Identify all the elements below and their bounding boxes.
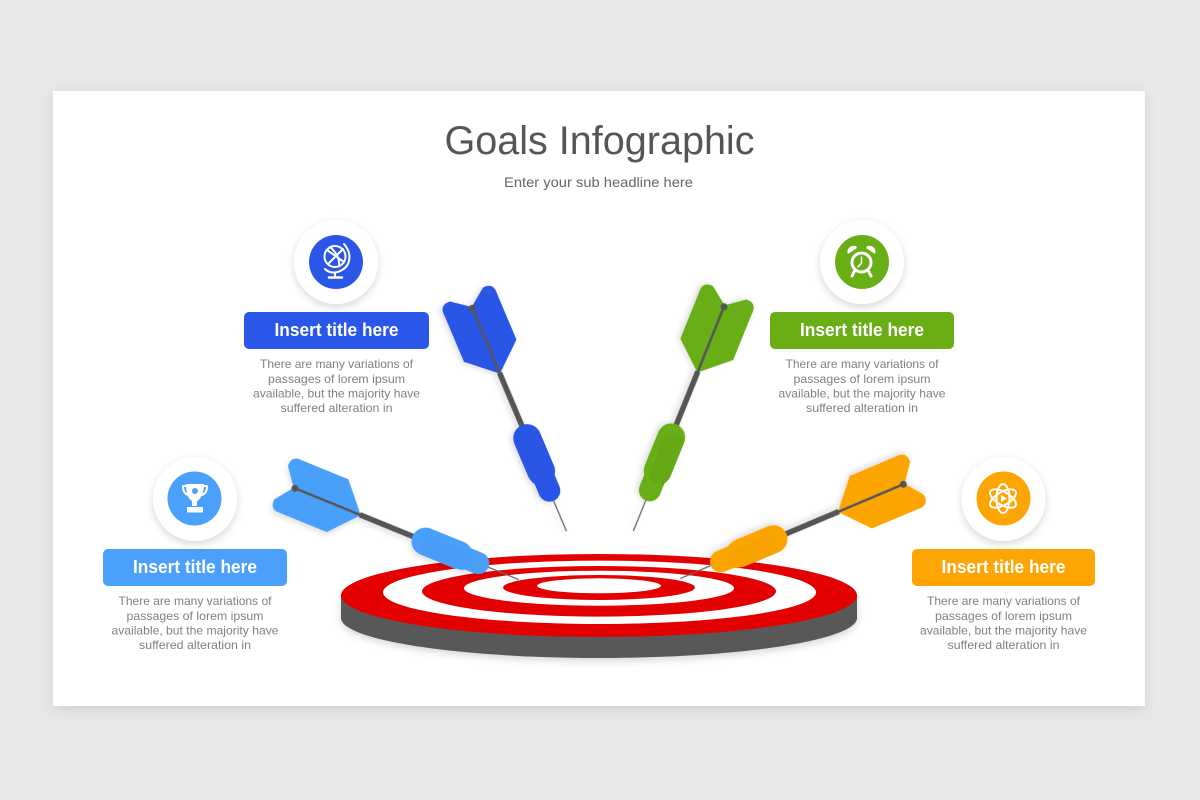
- description: available, but the majority have: [920, 624, 1087, 638]
- dart: green: [607, 282, 756, 542]
- shaft: [838, 484, 903, 512]
- red ring 2: [422, 566, 776, 617]
- description: suffered alteration in: [280, 401, 392, 415]
- needle: [552, 497, 566, 531]
- white ring 2: [464, 571, 734, 606]
- shaft thick: [500, 373, 525, 433]
- dart: dark blue: [440, 283, 593, 542]
- dart: light blue: [270, 456, 530, 606]
- title label: Insert title here: [800, 320, 924, 340]
- red ring 3: [503, 575, 695, 600]
- title bar: [103, 549, 287, 586]
- barrel: [740, 539, 773, 553]
- description: [920, 594, 1087, 652]
- description: [253, 357, 420, 415]
- description: available, but the majority have: [112, 624, 279, 638]
- title label: Insert title here: [942, 557, 1066, 577]
- description: available, but the majority have: [778, 386, 946, 400]
- panel: top-right green item: [770, 220, 954, 415]
- panel: right orange item: [912, 457, 1095, 652]
- barrel inner shade: [737, 545, 768, 558]
- shaft: [472, 308, 500, 374]
- tail dot: [290, 484, 300, 493]
- description: [778, 357, 946, 415]
- icon: alarm clock: [820, 220, 904, 304]
- tail dot: [719, 302, 729, 311]
- icon: globe: [294, 220, 378, 304]
- needle: [680, 564, 714, 578]
- panel: top-left blue item: [244, 220, 429, 415]
- barrel inner shade: [526, 444, 540, 475]
- shaft: [295, 488, 361, 515]
- icon: atom: [962, 457, 1046, 541]
- flights: [671, 282, 756, 383]
- needle: [633, 497, 647, 531]
- barrel inner shade: [659, 443, 672, 475]
- description: There are many variations of: [118, 594, 272, 608]
- description: available, but the majority have: [253, 386, 420, 400]
- description: There are many variations of: [927, 594, 1081, 608]
- shaft thick: [673, 372, 698, 432]
- shaft thick: [779, 512, 839, 537]
- barrel tip: [721, 544, 762, 561]
- dart: orange: [669, 452, 928, 605]
- title bar: [912, 549, 1095, 586]
- description: suffered alteration in: [139, 638, 251, 652]
- barrel: [527, 438, 541, 471]
- barrel tip: [650, 449, 667, 490]
- flights: [270, 456, 372, 542]
- description: passages of lorem ipsum: [935, 609, 1072, 623]
- white ring 1: [383, 561, 816, 624]
- tail dot: [899, 480, 908, 489]
- description: passages of lorem ipsum: [126, 609, 264, 623]
- description: passages of lorem ipsum: [268, 372, 405, 386]
- barrel: [426, 542, 459, 555]
- needle: [485, 566, 519, 580]
- panel: white slide card: [53, 91, 1145, 706]
- flights: [827, 452, 928, 538]
- subtitle: Enter your sub headline here: [504, 174, 693, 190]
- target board: [341, 554, 857, 658]
- outer red ring: [341, 554, 857, 637]
- panel: left light-blue item: [103, 457, 287, 652]
- shaft: [697, 307, 724, 373]
- title: Goals Infographic: [444, 119, 754, 163]
- title bar: [770, 312, 954, 349]
- flights: [440, 283, 526, 385]
- shaft thick: [360, 515, 420, 539]
- title bar: [244, 312, 429, 349]
- barrel inner shade: [431, 547, 462, 560]
- icon: trophy: [153, 457, 237, 541]
- board side: [341, 595, 857, 658]
- tail dot: [468, 304, 477, 313]
- description: There are many variations of: [786, 357, 939, 371]
- description: passages of lorem ipsum: [794, 372, 930, 386]
- description: suffered alteration in: [948, 638, 1060, 652]
- bullseye: [537, 578, 661, 593]
- title label: Insert title here: [274, 320, 398, 340]
- description: There are many variations of: [260, 357, 414, 371]
- barrel: [658, 437, 671, 471]
- description: [112, 594, 279, 652]
- description: suffered alteration in: [806, 401, 918, 415]
- barrel tip: [437, 546, 478, 563]
- barrel tip: [532, 449, 549, 491]
- title label: Insert title here: [133, 557, 257, 577]
